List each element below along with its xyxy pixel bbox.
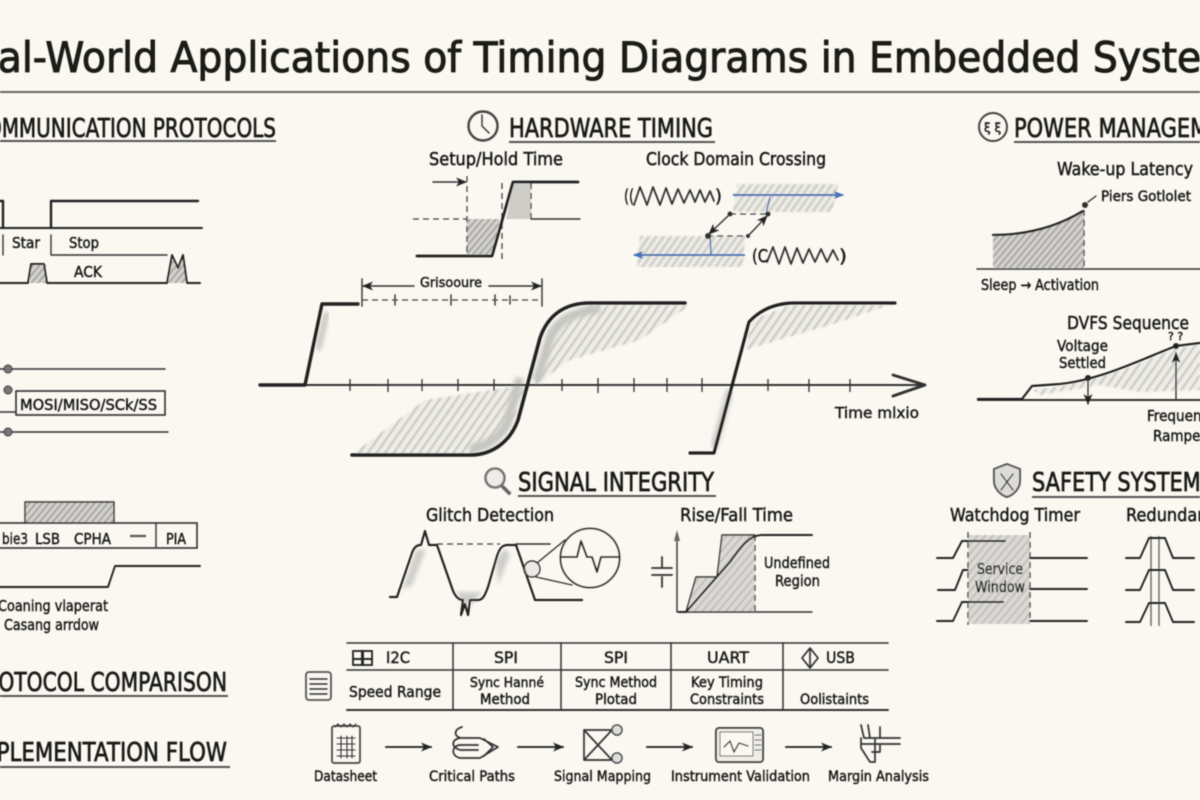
- dimension marker: [362, 276, 542, 306]
- UART frame diagram: CPHA: [74, 530, 112, 548]
- I2C timing diagram: ACK: [74, 263, 103, 281]
- DVFS sequence diagram: ? ?: [1168, 330, 1183, 343]
- icon: document: [306, 672, 331, 700]
- UART frame diagram: LSB: [35, 530, 60, 548]
- flow labels: Critical Paths: [429, 769, 515, 785]
- arrow: datasheet to critical paths: [386, 746, 431, 748]
- rise/fall time diagram: Undefined: [764, 554, 830, 572]
- icon: power cycle: ξ ξ: [984, 121, 1001, 135]
- watchdog timer diagram: Service: [977, 560, 1023, 578]
- table text: Oolistaints: [800, 692, 869, 708]
- icon: caliper: [861, 725, 900, 762]
- rise/fall time diagram: [652, 505, 830, 612]
- table text: Key Timing: [691, 675, 763, 691]
- flow labels: [314, 769, 929, 785]
- panel: communication protocols: [0, 114, 276, 634]
- flow labels: Instrument Validation: [671, 769, 810, 785]
- arrow: critical paths to signal mapping: [518, 746, 563, 748]
- table text: [349, 648, 869, 708]
- setup/hold time diagram: Setup/Hold Time: [429, 149, 563, 170]
- clock domain crossing diagram: ((: [624, 186, 634, 207]
- wake-up latency diagram: [977, 159, 1200, 294]
- DVFS sequence diagram: Voltage: [1057, 337, 1108, 355]
- SPI signal lines: [0, 365, 168, 436]
- table text: Method: [480, 692, 530, 708]
- UART frame diagram: PIA: [166, 530, 187, 548]
- table text: Plotad: [595, 692, 637, 708]
- I2C timing diagram: Star: [12, 234, 41, 252]
- table text: Sync Hanné: [470, 676, 544, 691]
- arrow: signal mapping to instrument validation: [647, 746, 692, 748]
- icon: clock: [468, 112, 498, 140]
- UART frame diagram: Coaning vlaperat: [0, 597, 108, 615]
- icon: USB plug: [802, 648, 818, 668]
- panel: hardware timing: [260, 112, 925, 455]
- clock domain crossing diagram: (C: [752, 246, 768, 267]
- icon: power cycle: [979, 113, 1007, 141]
- table text: SPI: [494, 648, 518, 667]
- UART frame diagram: [0, 502, 200, 634]
- wake-up latency diagram: Piers Gotlolet: [1101, 189, 1191, 205]
- icon: datasheet: [332, 724, 360, 763]
- UART frame diagram: Casang arrdow: [4, 616, 99, 634]
- rise/fall time diagram: Rise/Fall Time: [680, 505, 793, 526]
- glitch detection diagram: Glitch Detection: [426, 505, 554, 526]
- panel: signal integrity: [390, 468, 830, 615]
- dimension marker: Grisooure: [420, 276, 482, 291]
- main timing chart: [260, 276, 925, 455]
- panel: power management: [977, 113, 1200, 445]
- panel: safety systems: [937, 464, 1200, 626]
- table text: SPI: [604, 648, 628, 667]
- icon: magnifying glass: [486, 468, 510, 496]
- flow labels: Datasheet: [314, 769, 377, 785]
- table text: USB: [826, 648, 855, 667]
- flow labels: Signal Mapping: [554, 769, 651, 785]
- table text: Speed Range: [349, 683, 441, 701]
- icon: chip cluster: [353, 651, 372, 665]
- icon: signal mapping: [584, 725, 622, 763]
- flow labels: Margin Analysis: [828, 769, 929, 785]
- table text: UART: [707, 648, 749, 667]
- glitch detection diagram: [390, 505, 620, 615]
- panel: protocol comparison table: [306, 643, 888, 710]
- redundancy diagram: [1126, 505, 1200, 626]
- heading: hardware timing: HARDWARE TIMING: [509, 114, 713, 144]
- arrow: instrument validation to margin analysis: [786, 746, 831, 748]
- I2C timing diagram: Stop: [69, 234, 99, 252]
- panel: implementation flow: [314, 724, 929, 785]
- clock domain crossing diagram: [624, 149, 847, 267]
- table text: I2C: [386, 648, 410, 667]
- clock domain crossing diagram: ): [839, 246, 847, 267]
- rise/fall time diagram: Region: [775, 572, 820, 590]
- clock domain crossing diagram: Clock Domain Crossing: [646, 149, 826, 170]
- watchdog timer diagram: Watchdog Timer: [950, 505, 1081, 526]
- SPI signal lines: MOSI/MISO/SCk/SS: [20, 396, 157, 414]
- watchdog timer diagram: Window: [975, 578, 1025, 596]
- wake-up latency diagram: Sleep → Activation: [981, 276, 1099, 294]
- heading: signal integrity: SIGNAL INTEGRITY: [518, 468, 714, 498]
- DVFS sequence diagram: Settled: [1059, 354, 1106, 372]
- setup/hold time diagram: [413, 149, 580, 262]
- DVFS sequence diagram: [978, 313, 1200, 445]
- table text: Sync Method: [575, 675, 657, 691]
- clock domain crossing diagram: ): [715, 186, 722, 207]
- main timing chart: Time mlxio: [834, 404, 919, 422]
- table text: Constraints: [690, 692, 764, 708]
- UART frame diagram: bie3: [2, 530, 28, 548]
- watchdog timer diagram: [937, 505, 1087, 625]
- icon: shield: [994, 464, 1020, 497]
- zoomed glitch inset: [560, 528, 620, 588]
- icon: oscilloscope: [716, 728, 763, 762]
- I2C timing diagram: [0, 201, 202, 283]
- icon: critical paths: [453, 727, 498, 758]
